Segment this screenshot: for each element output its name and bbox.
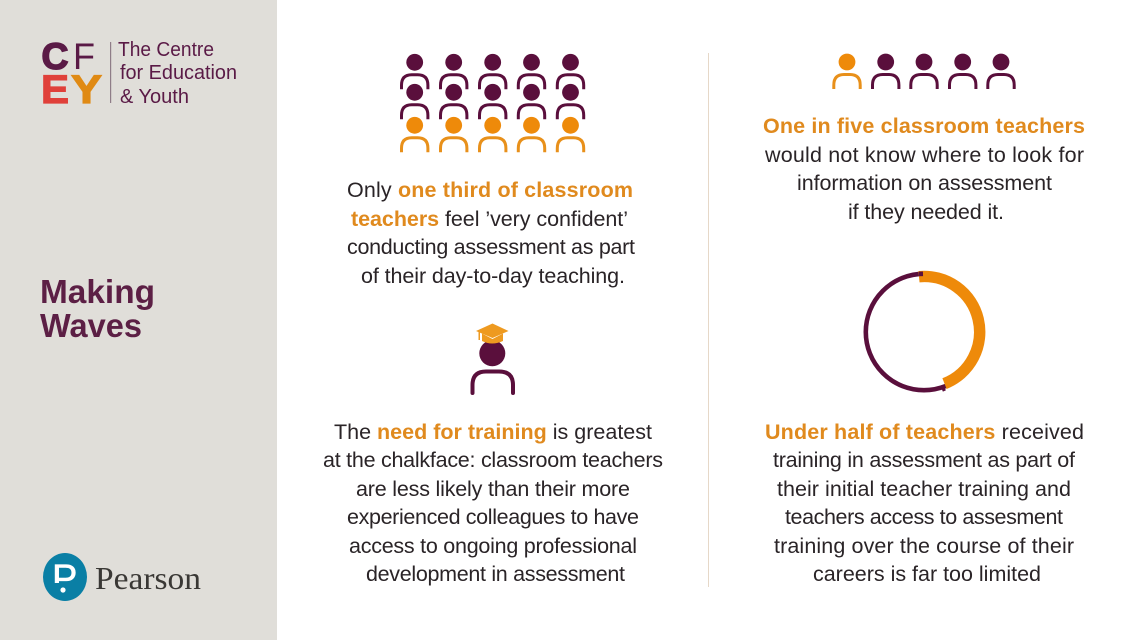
text block: under half of teachers: training in assessment as part of (773, 448, 1075, 472)
icon: five people, one orange (834, 54, 1014, 89)
text block: need for training: experienced colleagues to have (347, 505, 639, 529)
text block: need for training (323, 420, 663, 586)
logo: CFEY: F (73, 36, 95, 77)
text block: need for training: development in assessment (366, 562, 625, 586)
text block: one in five classroom teachers (763, 114, 1085, 224)
text block: one in five classroom teachers: information on assessment (797, 171, 1052, 195)
text block: need for training: at the chalkface: classroom teachers (323, 448, 663, 472)
text block: under half of teachers: their initial teacher training and (777, 477, 1071, 501)
text block: under half of teachers: training over the course of their (774, 534, 1074, 558)
text block: need for training: The need for training is greatest (334, 420, 652, 444)
logo: CFEY: for Education (120, 62, 237, 84)
icon: graduate with mortarboard (472, 324, 513, 393)
divider (708, 53, 709, 587)
text block: one third of classroom teachers: conducting assessment as part (347, 235, 635, 259)
text block: one in five classroom teachers: would not know where to look for (764, 143, 1084, 167)
logo: CFEY: Y (71, 68, 102, 112)
text block: under half of teachers: teachers access to assesment (785, 505, 1063, 529)
text block: one third of classroom teachers: of their day-to-day teaching. (361, 264, 625, 288)
logo: CFEY: & Youth (120, 86, 189, 108)
text block: under half of teachers: careers is far too limited (813, 562, 1041, 586)
logo: Pearson (43, 553, 201, 601)
heading: Making Waves (40, 273, 155, 344)
text block: one third of classroom teachers: teachers feel ’very confident’ (351, 207, 628, 231)
text block: one in five classroom teachers: if they needed it. (848, 200, 1004, 224)
text block: under half of teachers: Under half of teachers received (765, 420, 1084, 444)
text block: one third of classroom teachers: Only one third of classroom (347, 178, 633, 202)
logo: Pearson: Pearson (95, 560, 201, 596)
logo: Pearson: P (52, 558, 77, 600)
logo: CFEY (41, 36, 237, 112)
icon: grid of fifteen people, one third orange (402, 54, 584, 152)
logo: CFEY: The Centre (118, 39, 214, 61)
text block: one third of classroom teachers (347, 178, 635, 288)
text block: need for training: access to ongoing professional (349, 534, 637, 558)
chart: donut ring under half (866, 274, 982, 390)
heading: Making Waves: Making (40, 273, 155, 310)
heading: Making Waves: Waves (40, 307, 142, 344)
text block: need for training: are less likely than their more (356, 477, 630, 501)
text block: one in five classroom teachers: One in five classroom teachers (763, 114, 1085, 138)
logo: CFEY: C (42, 36, 68, 77)
text block: under half of teachers (765, 420, 1084, 586)
sidebar panel (0, 0, 277, 640)
logo: CFEY: E (41, 68, 69, 112)
